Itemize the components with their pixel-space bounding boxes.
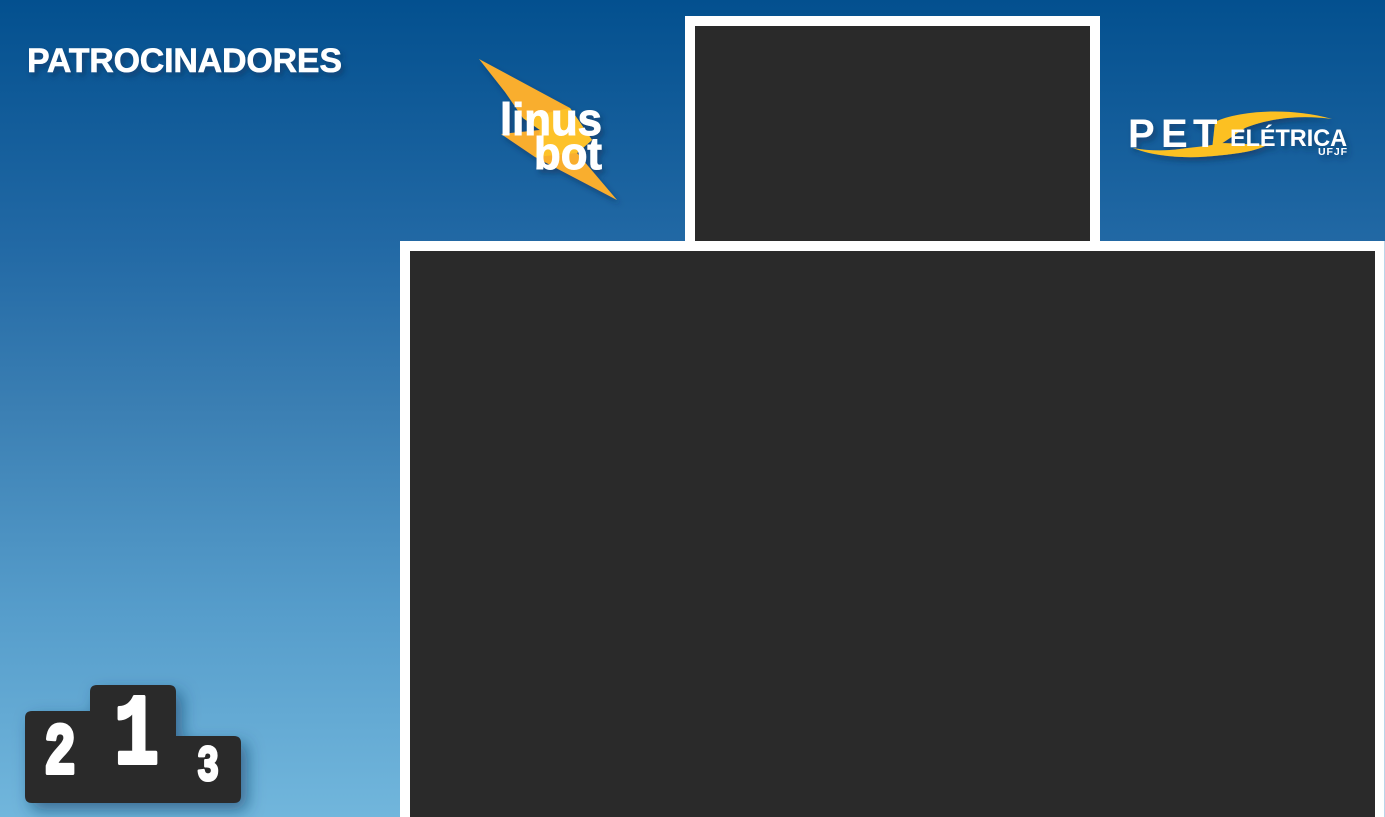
right edge highlight <box>1384 241 1385 817</box>
icon: lightning bolt <box>479 59 617 200</box>
number 2: 2 <box>44 713 76 795</box>
eletrica wordmark: ELÉTRICA <box>1230 124 1347 152</box>
panel: large main frame <box>405 246 1380 817</box>
logo: pet eletrica ufjf <box>1128 112 1348 158</box>
heading: patrocinadores: PATROCINADORES <box>27 42 342 80</box>
ufjf label: UFJF <box>1318 146 1348 158</box>
linusbot wordmark: linus <box>500 94 602 145</box>
logo: linusbot <box>479 59 617 200</box>
number 1: 1 <box>114 681 159 794</box>
linusbot wordmark: bot <box>534 128 602 179</box>
pet wordmark: PET <box>1128 112 1217 156</box>
linusbot wordmark <box>500 94 602 179</box>
number 3: 3 <box>197 739 219 796</box>
panel: small top frame <box>690 21 1095 251</box>
icon: podium <box>25 681 241 803</box>
podium base <box>25 685 241 803</box>
yellow swoosh <box>1133 112 1332 157</box>
